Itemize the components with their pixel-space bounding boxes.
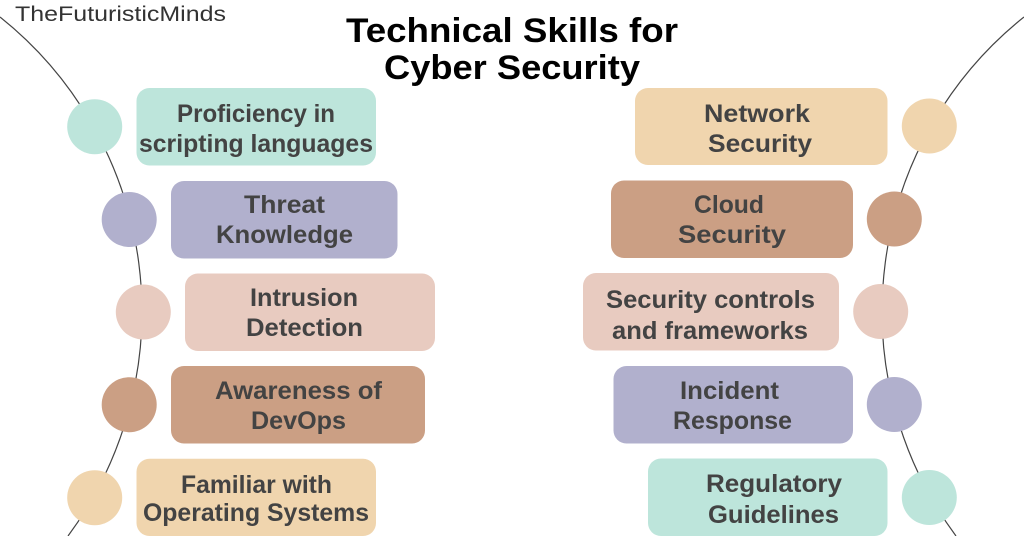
item: Proficiency in scripting languages [136,88,376,166]
item: Awareness of DevOps [171,366,425,444]
dot: Security controls [853,284,908,339]
dot: Intrusion [116,284,171,340]
item: Regulatory Guidelines: Regulatory [706,470,842,498]
item: Network Security: Network [704,100,810,128]
item: Familiar with Operating Systems: Operating Systems [143,499,369,527]
dot: DevOps [102,377,157,432]
title: Technical Skills for [346,12,678,50]
item: Network Security [635,88,888,165]
brand label: TheFuturisticMinds [15,3,226,26]
item: Awareness of DevOps: DevOps [251,407,346,435]
item: Awareness of DevOps: Awareness of [215,377,383,405]
item: Incident Response: Response [673,407,792,435]
dot: Operating Systems [67,470,122,525]
title: Cyber Security [384,49,640,87]
dot: Cloud [867,192,922,246]
item: Security controls and frameworks: and frameworks [612,317,808,345]
item: Incident Response: Incident [680,377,780,405]
item: Cloud Security: Cloud [694,191,764,219]
dot: Network [902,98,957,154]
item: Familiar with Operating Systems: Familiar with [181,471,332,499]
title [346,12,678,87]
item: Threat Knowledge: Threat [244,191,326,219]
item: Cloud Security: Security [678,221,786,249]
item: Threat Knowledge [171,181,398,258]
item: Regulatory Guidelines [648,458,888,536]
item: Intrusion Detection: Intrusion [250,284,358,312]
item: Incident Response [614,366,853,444]
item: Regulatory Guidelines: Guidelines [708,501,839,529]
dot: Regulatory [902,470,957,525]
item: Threat Knowledge: Knowledge [216,221,353,249]
item: Security controls and frameworks: Security controls [606,286,815,314]
item: Security controls and frameworks [583,273,839,350]
right timeline arc [882,17,1024,536]
item: Intrusion Detection: Detection [246,314,363,342]
dot: Incident [867,377,922,432]
item: Familiar with Operating Systems [136,459,376,536]
item: Proficiency in scripting languages: Proficiency in [177,100,335,128]
dot: Threat [102,192,157,247]
item: Cloud Security [611,180,853,258]
item: Network Security: Security [708,130,812,158]
item: Intrusion Detection [185,274,435,351]
dot: Proficiency [67,99,122,154]
item: Proficiency in scripting languages: scripting languages [139,130,373,158]
left timeline arc [0,17,142,536]
